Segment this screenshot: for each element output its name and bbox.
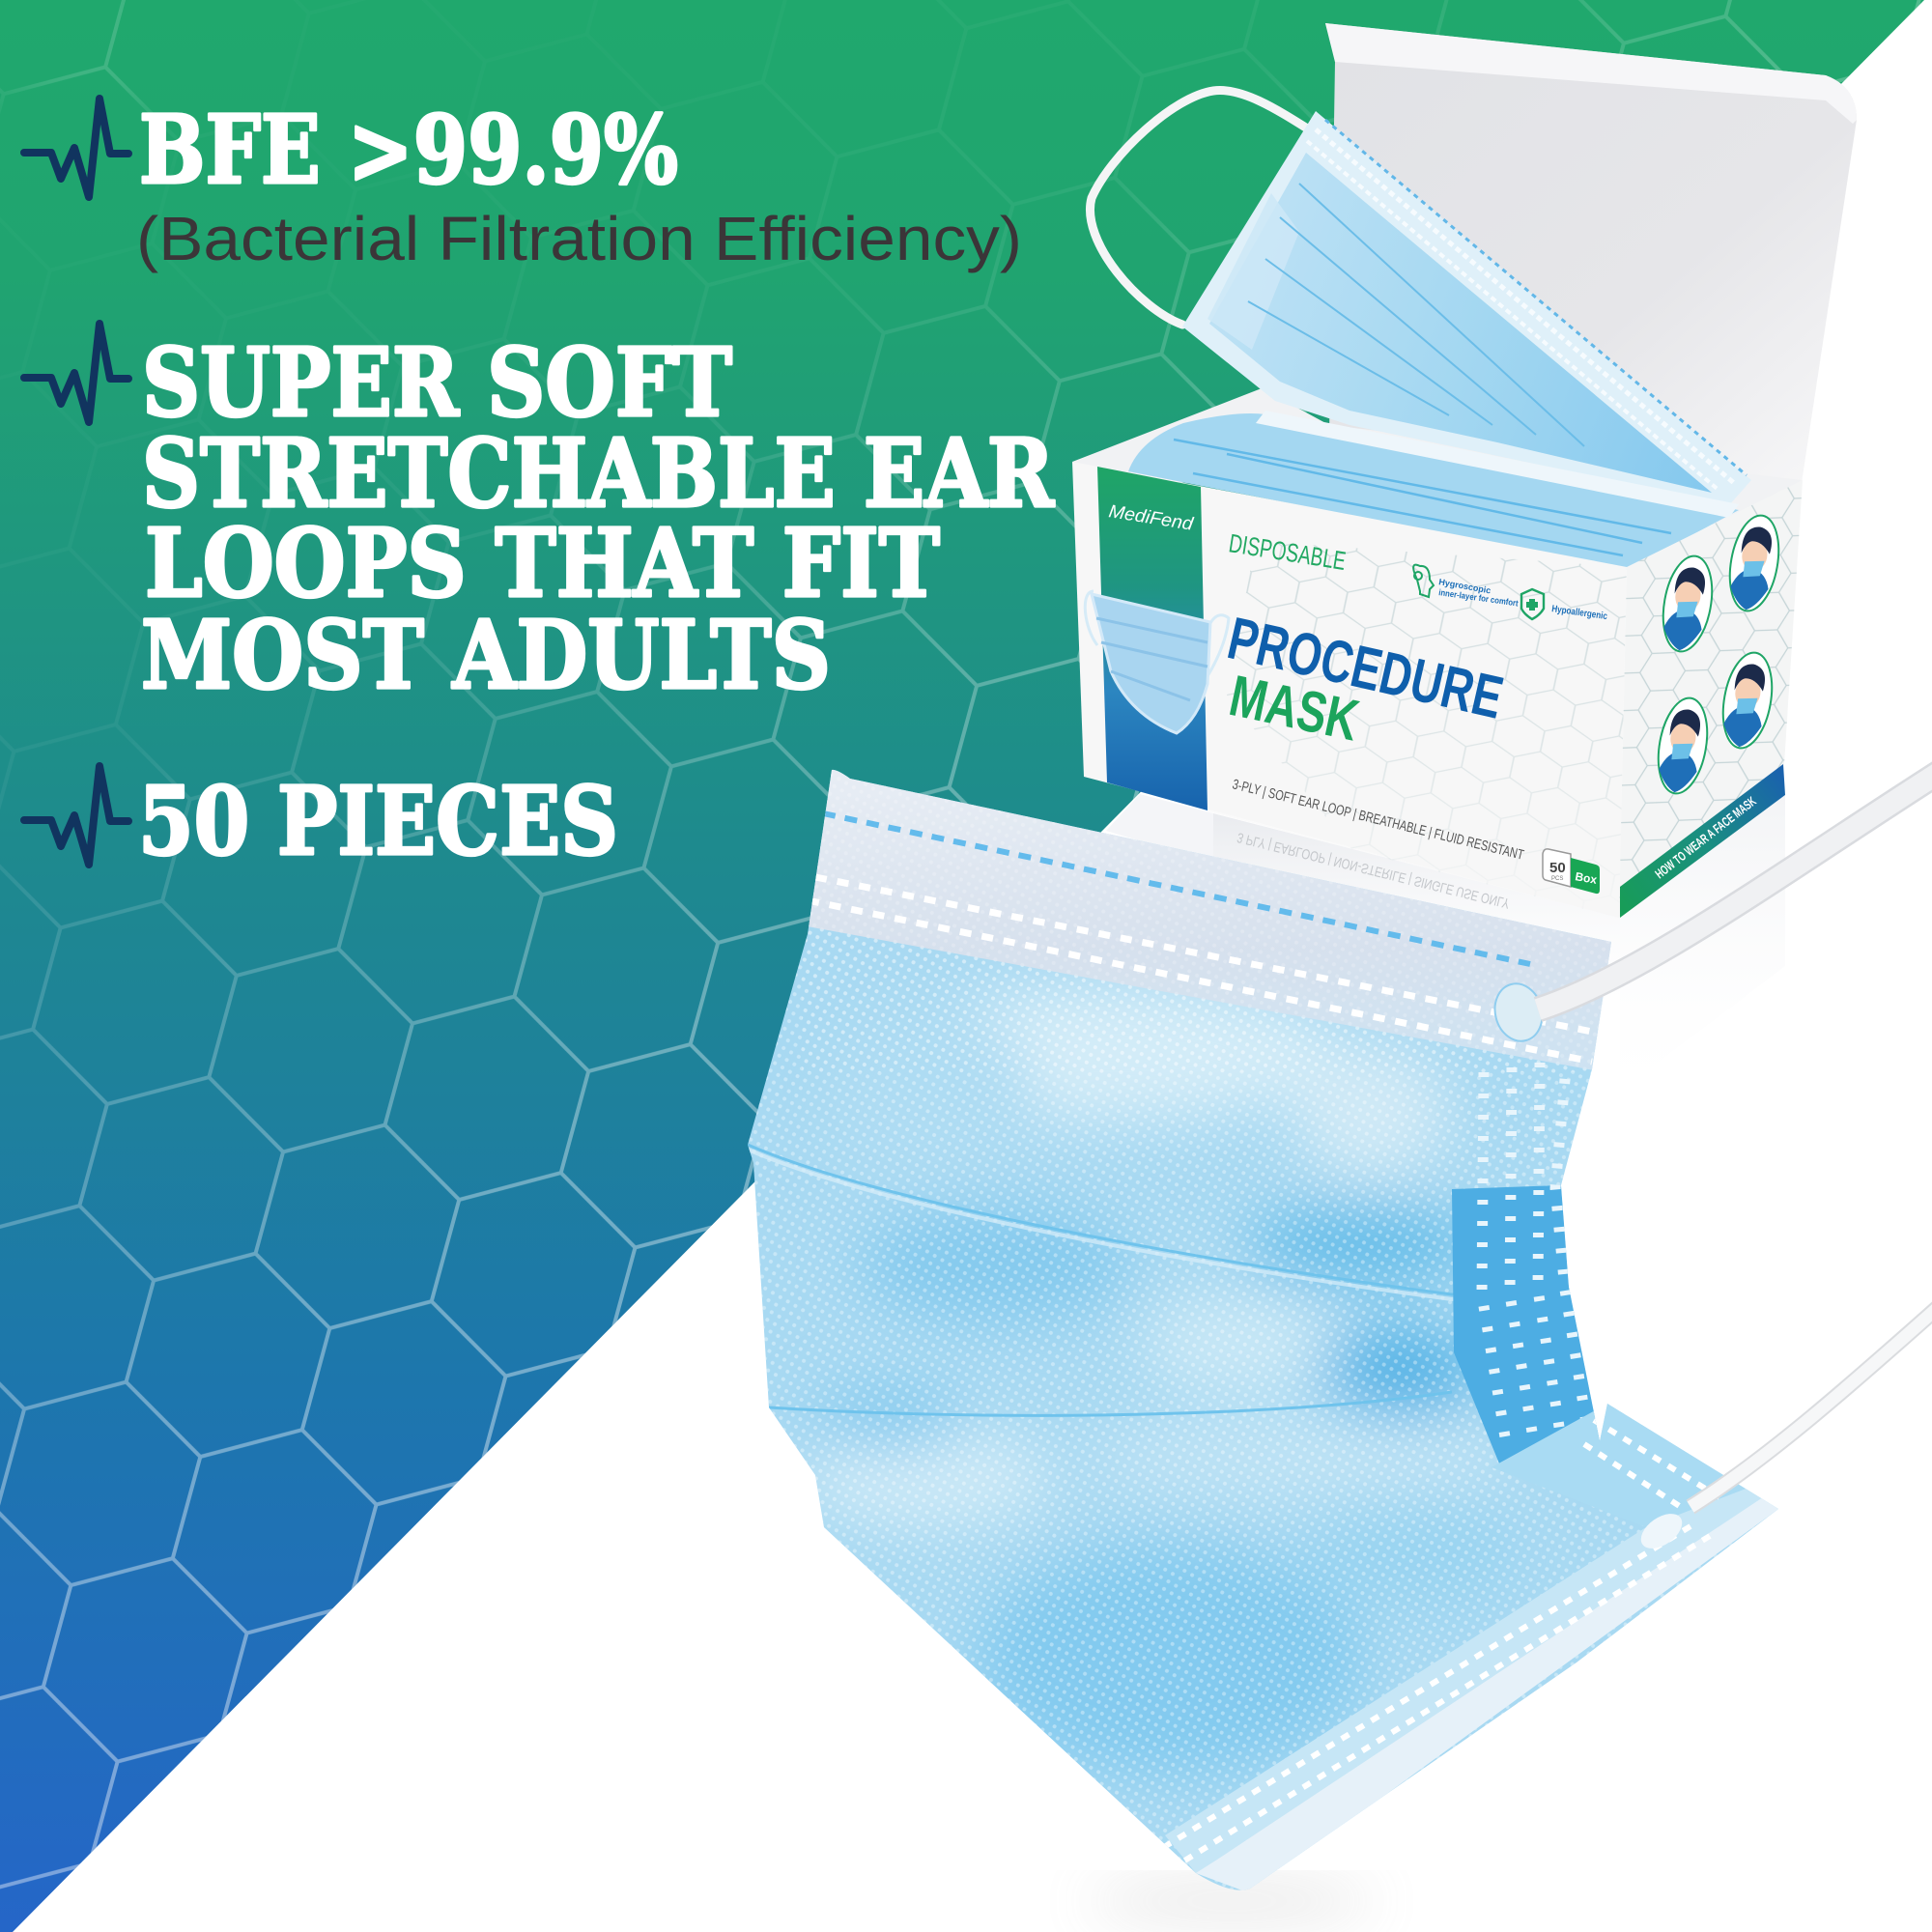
bottom band stitches (1164, 1420, 1719, 1864)
front hexagon pattern (1227, 541, 1627, 918)
illustration: step 3 (1652, 695, 1714, 797)
icon: heartbeat pulse 2 (24, 324, 128, 422)
side hexagon pattern (1619, 480, 1803, 918)
icon: heartbeat pulse 3 (24, 766, 128, 865)
heading: 50 pieces: 50 PIECES (138, 766, 618, 876)
text: hygroscopic inner-layer: inner-layer for comfort (1438, 587, 1519, 609)
top band stitches (823, 813, 1530, 964)
product: large surgical mask (734, 753, 1932, 1913)
heading: super soft stretchable ear loops: SUPER SOFT (142, 327, 732, 438)
fabric texture (734, 753, 1797, 1913)
front pattern fade (1208, 599, 1627, 918)
green brand panel (1097, 467, 1208, 810)
box side panel (1619, 480, 1803, 918)
icon: head with check (1413, 565, 1434, 597)
heading: super soft stretchable ear loops: MOST ADULTS (141, 600, 831, 710)
icon: heartbeat pulse 1 (24, 99, 128, 197)
badge: 50 pcs box: Box (1574, 869, 1599, 887)
stack of masks in box (1128, 411, 1739, 570)
text: hygroscopic inner-layer: Hygroscopic (1438, 577, 1492, 595)
feature: BFE (24, 95, 1022, 273)
text: hygroscopic inner-layer (1438, 577, 1519, 609)
brand name: MediFend (1107, 501, 1196, 535)
bottom right corner panel (1492, 1404, 1745, 1526)
badge: 50 pcs box (1543, 849, 1600, 894)
subheading: Bacterial Filtration Efficiency: (Bacterial Filtration Efficiency) (136, 204, 1022, 273)
title: mask: MASK (1224, 663, 1364, 753)
small mask illustration (1085, 591, 1229, 733)
box reflection (1106, 794, 1785, 1092)
heading: super soft stretchable ear loops: STRETCHABLE EAR (142, 418, 1055, 528)
heading: BFE >99.9%: BFE >99.9% (139, 95, 678, 205)
illustration: step 2 (1723, 512, 1785, 614)
lower ear loop weld (1640, 1514, 1683, 1548)
top band (802, 763, 1615, 1070)
heading: super soft stretchable ear loops: LOOPS THAT FIT (145, 508, 940, 618)
box rear interior (1072, 388, 1802, 526)
title: procedure: PROCEDURE (1222, 605, 1509, 732)
shaded fabric areas (802, 985, 1526, 1777)
box reflection: 3 PLY | EARLOOP | NON-STERILE | SINGLE USE ONLY (1236, 829, 1512, 911)
mask body (734, 753, 1797, 1913)
product: mask box (1072, 23, 1857, 918)
text: how to wear a face mask: HOW TO WEAR A FACE MASK (1653, 794, 1759, 881)
upper mask in box (1182, 111, 1751, 505)
badge: 50 pcs box: 50 (1549, 860, 1566, 876)
shadow under large mask (1087, 1886, 1377, 1917)
illustration: step 1 (1657, 553, 1719, 655)
ear loop: upper right (1538, 771, 1932, 1009)
side strip (1620, 764, 1785, 918)
feature: super soft ear loops (24, 324, 1055, 710)
how-to illustrations (1652, 512, 1785, 797)
box front panel (1072, 462, 1627, 918)
right side stitches (1482, 1058, 1588, 1449)
text: disposable: DISPOSABLE (1227, 528, 1348, 576)
upper ear loop weld (1493, 982, 1543, 1042)
badge: 50 pcs box: PCS (1551, 876, 1563, 882)
illustration: step 4 (1717, 649, 1778, 752)
box lid (1325, 23, 1857, 483)
icon: shield with cross (1521, 589, 1544, 619)
pleat folds (748, 1145, 1569, 1415)
text: hypoallergenic: Hypoallergenic (1551, 604, 1608, 622)
right side dark strip (1452, 1185, 1600, 1463)
ear loop: lower right (1690, 1304, 1932, 1507)
bottom right band (1165, 1488, 1778, 1893)
ear loop of upper mask (1090, 91, 1312, 325)
text: feature line: 3-PLY | SOFT EAR LOOP | BREATHABLE | FLUID RESISTANT (1231, 777, 1525, 864)
feature: 50 pieces (24, 766, 618, 876)
heading: super soft stretchable ear loops (141, 327, 1055, 710)
